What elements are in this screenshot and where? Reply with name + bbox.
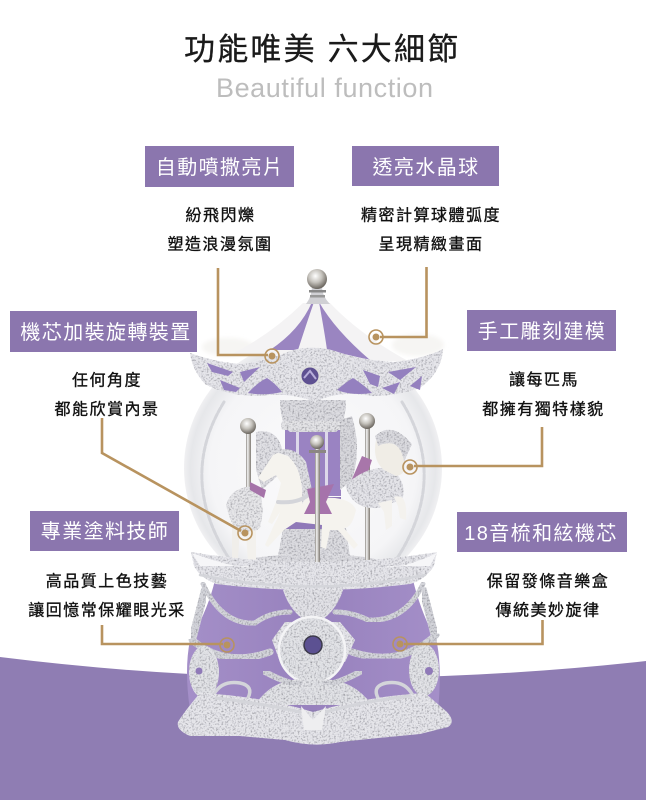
label box: 手工雕刻建模 (478, 320, 606, 343)
description: 讓每匹馬 (509, 370, 579, 389)
crown band (190, 348, 443, 402)
description (482, 370, 605, 418)
product: carousel snow globe (178, 269, 452, 745)
label box (30, 511, 179, 551)
label box: 18音梳和絃機芯 (464, 522, 618, 545)
description (167, 206, 273, 254)
description: 紛飛閃爍 (185, 206, 256, 224)
label box (457, 512, 627, 552)
description: 高品質上色技藝 (46, 572, 168, 590)
title: 功能唯美 六大細節 (184, 32, 460, 67)
label box (467, 310, 616, 351)
description (487, 572, 609, 620)
base collar (191, 552, 437, 590)
description (28, 572, 186, 620)
leader line (218, 268, 279, 363)
label box: 機芯加裝旋轉裝置 (20, 321, 192, 344)
callout: crystal ball (352, 146, 501, 344)
leader line (102, 625, 234, 652)
description: 呈現精緻畫面 (378, 236, 484, 254)
leader line from rotating movement (102, 418, 252, 540)
leader line (393, 620, 542, 651)
label box (145, 146, 294, 187)
callout: coating craft (28, 418, 252, 652)
central column (243, 400, 383, 572)
description: 塑造浪漫氛圍 (167, 236, 273, 254)
label box (352, 146, 499, 186)
description (54, 372, 160, 418)
description: 讓回憶常保耀眼光采 (28, 600, 186, 620)
callout: hand-carved model (403, 310, 616, 474)
label box (10, 311, 197, 352)
background band (0, 657, 646, 800)
leader line (369, 267, 426, 344)
horse: rear left (226, 418, 284, 564)
subtitle: Beautiful function (216, 73, 433, 103)
label box: 透亮水晶球 (372, 156, 480, 179)
base body (187, 580, 440, 710)
feathers (202, 334, 444, 356)
base foot (178, 693, 452, 745)
description: 都能欣賞內景 (54, 400, 160, 418)
description: 精密計算球體弧度 (361, 206, 501, 224)
callout: rotating movement (10, 311, 197, 418)
leader line (403, 427, 542, 474)
description (361, 206, 501, 254)
horse: right (345, 413, 412, 564)
description: 傳統美妙旋律 (495, 602, 601, 620)
canopy (232, 302, 410, 362)
horse: front (258, 435, 358, 567)
label box: 自動噴撒亮片 (156, 156, 284, 179)
callout: auto glitter (145, 146, 294, 363)
description: 任何角度 (72, 372, 142, 390)
label box: 專業塗料技師 (41, 520, 169, 543)
description: 都擁有獨特樣貌 (482, 400, 605, 418)
callout: 18-note movement (393, 512, 627, 651)
description: 保留發條音樂盒 (487, 572, 609, 590)
crystal globe (184, 339, 442, 597)
finial (306, 269, 330, 304)
